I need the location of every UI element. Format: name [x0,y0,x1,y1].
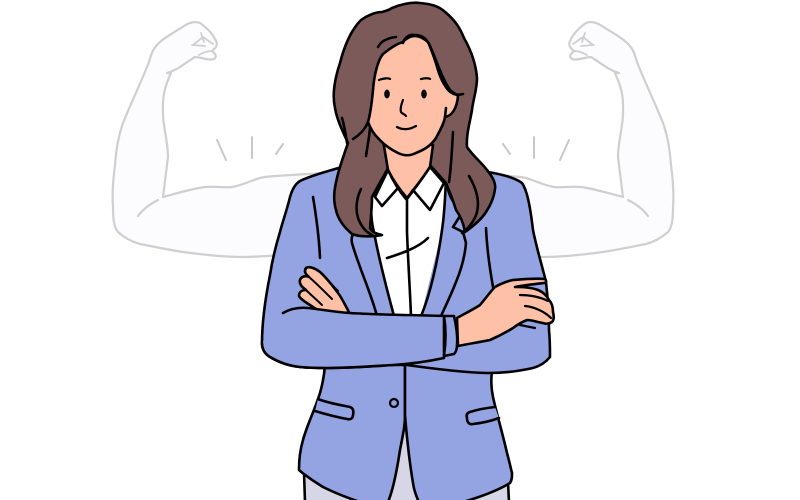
eyebrows [379,78,430,80]
hair back [334,3,495,236]
face [368,36,458,155]
ghost flexed arm: right [456,22,673,257]
jacket body with left and right sleeve outer edges [262,166,550,373]
finger lines of tucked hand [306,272,338,305]
shirt [372,170,447,316]
hair front strand [403,35,463,95]
left jacket lapel [352,203,394,316]
elbow crease [138,200,158,216]
mouth [397,126,416,129]
tucked hand [299,267,350,314]
jacket pocket left [315,399,353,419]
left jacket crease [313,197,320,258]
fist finger lines [192,33,213,55]
eye right [421,90,427,98]
collar left [375,170,406,206]
finger lines of right hand [520,295,551,328]
jacket pocket right [467,407,499,424]
jacket lower left panel [299,362,405,500]
ghost flexed arm: left [113,22,330,257]
shirt placket and fold [387,200,428,316]
eye left [384,90,390,98]
nose [401,100,406,116]
fist finger lines [573,33,594,55]
jacket cuff [444,316,457,356]
hair strand lines [342,37,478,235]
jacket lower right panel [405,362,512,500]
elbow crease [628,200,648,216]
strength marks: left [217,137,283,160]
jacket button [390,399,398,407]
strength marks: right [503,137,569,160]
woman figure [262,3,554,500]
near sleeve [262,308,444,368]
right jacket lapel [421,180,466,316]
trousers [304,400,510,500]
collar right [407,167,444,210]
neck [383,140,433,198]
right forearm and hand [457,279,554,346]
sleeve crease [486,228,493,287]
